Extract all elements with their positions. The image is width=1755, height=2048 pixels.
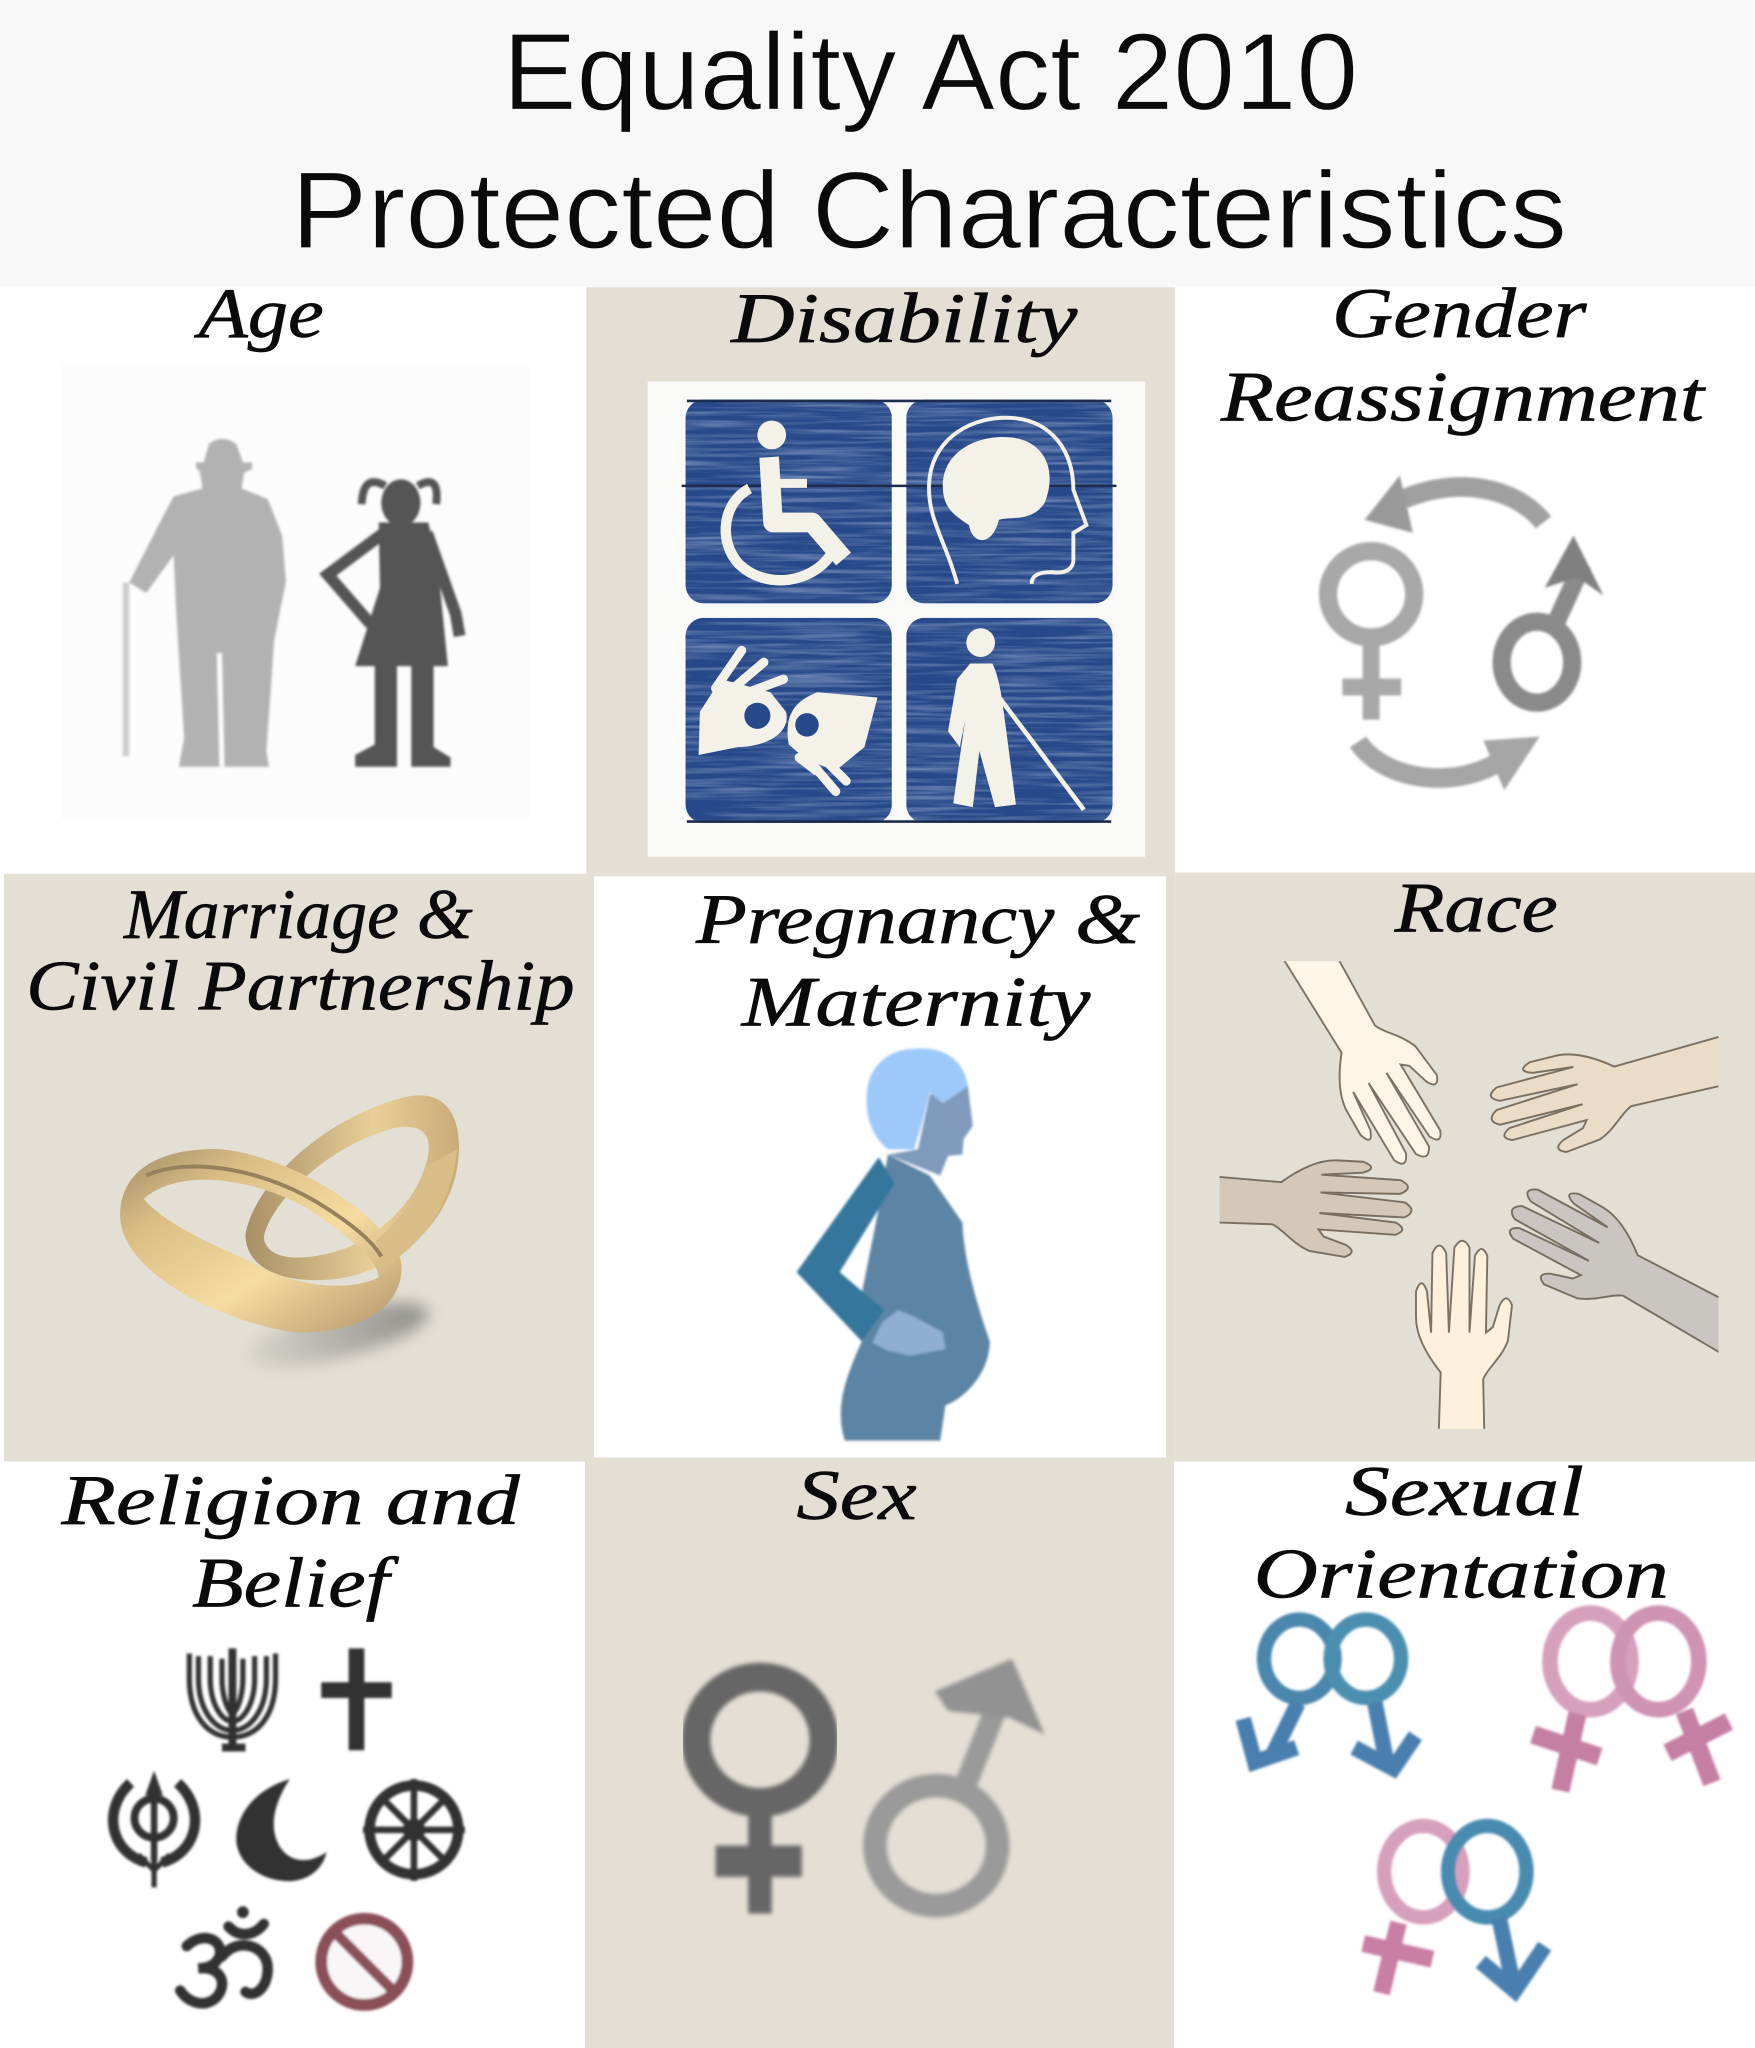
title line 1: Equality Act 2010 <box>503 12 1358 134</box>
heading: race: Race <box>1393 869 1558 947</box>
heading: belief: Belief <box>192 1545 399 1623</box>
heading: civil partnership: Civil Partnership <box>26 948 575 1026</box>
icon: young girl <box>328 479 460 767</box>
panel: age <box>0 275 586 874</box>
icon: female couple <box>1533 1613 1729 1791</box>
panel: disability <box>586 280 1175 874</box>
panel: pregnancy and maternity <box>586 874 1175 1462</box>
icon: om <box>180 1908 268 2003</box>
title band <box>0 0 1755 287</box>
icon: elderly man with cane <box>123 439 286 767</box>
heading: marriage: Marriage & <box>123 876 473 954</box>
heading: pregnancy: Pregnancy & <box>695 881 1140 959</box>
icon: five hands <box>1220 961 1718 1429</box>
heading: sex: Sex <box>797 1457 917 1535</box>
icon: wheelchair <box>726 421 844 580</box>
heading: sexual: Sexual <box>1345 1453 1584 1531</box>
panel: sex <box>585 1457 1174 2048</box>
heading: religion and: Religion and <box>60 1462 521 1540</box>
heading: reassignment: Reassignment <box>1220 359 1706 437</box>
panel: marriage and civil partnership <box>4 874 590 1462</box>
icon: male symbol <box>875 1659 1045 1906</box>
panel: race <box>1175 872 1755 1462</box>
disability sign <box>648 381 1145 857</box>
heading: orientation: Orientation <box>1254 1535 1669 1613</box>
icon: head and brain <box>929 418 1086 584</box>
icon: pregnant woman <box>797 1048 990 1441</box>
icon: crescent <box>236 1779 326 1881</box>
heading: disability: Disability <box>730 280 1078 358</box>
heading: maternity: Maternity <box>740 963 1091 1041</box>
icon: male couple <box>1243 1620 1415 1768</box>
panel: gender reassignment <box>1175 275 1755 874</box>
icon: female symbol <box>696 1677 824 1913</box>
heading: age: Age <box>194 275 324 353</box>
icon: person with white cane <box>948 628 1084 810</box>
icon: dharma wheel <box>363 1779 465 1881</box>
icon: gender cycle <box>1328 475 1604 790</box>
panel: religion and belief <box>0 1462 585 2048</box>
icon: menorah <box>189 1648 276 1748</box>
icon: wedding rings <box>120 1095 459 1380</box>
icon: cross <box>321 1648 392 1750</box>
icon: mixed couple <box>1363 1826 1545 1993</box>
icon: khanda <box>113 1772 195 1887</box>
icon: no symbol <box>321 1919 407 2005</box>
title line 2: Protected Characteristics <box>291 150 1567 272</box>
heading: gender: Gender <box>1332 275 1587 353</box>
panel: sexual orientation <box>1174 1453 1755 2048</box>
icon: sign language hands <box>699 650 878 792</box>
